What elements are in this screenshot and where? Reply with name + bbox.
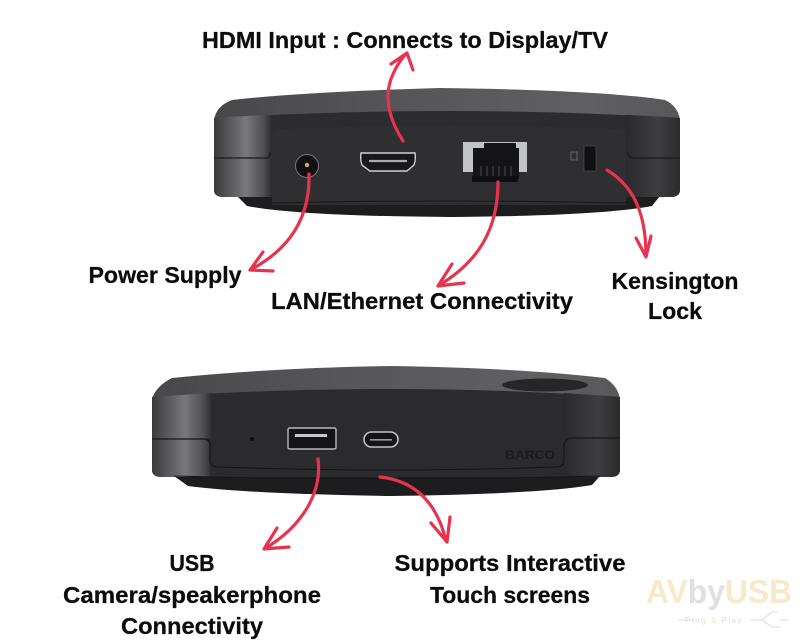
seam lines [152,438,620,470]
label: USB: USB [170,550,214,576]
device: front view with USB ports [152,366,620,496]
recessed port panel [272,126,626,205]
device: rear view with ports [214,88,680,217]
logo USB icon [678,612,788,627]
USB C port [364,432,398,447]
label: lock: Lock [648,298,702,324]
device seam lines [214,152,680,158]
power button [502,378,588,392]
HDMI port [361,153,415,171]
status LED [250,437,254,441]
label: Kensington: Kensington [612,268,738,294]
label: touch screens: Touch screens [430,582,590,608]
HDMI inner contacts [369,160,407,162]
label: power supply: Power Supply [88,262,242,288]
label: camera: Camera/speakerphone [63,582,321,608]
device body [152,389,620,477]
device top surface [214,88,680,120]
arrow: Kensington [607,170,651,257]
label: supports: Supports Interactive [394,550,626,576]
device body [214,111,680,197]
device right corner [626,115,680,197]
label: LAN: LAN/Ethernet Connectivity [271,288,573,314]
Kensington lock slot [571,146,596,171]
label: connectivity: Connectivity [121,613,263,639]
arrow: HDMI input [388,53,413,141]
device right corner [564,393,620,477]
title: HDMI input label: HDMI Input : Connects to Display/TV [202,27,609,53]
device base shadow [237,196,660,217]
brand mark: BARCO [505,448,555,462]
device left corner [214,115,272,197]
logo: AVbyUSB [646,573,792,627]
USB A port [288,428,336,449]
lower chin line [272,201,626,203]
chin line [174,476,600,479]
arrow: LAN [438,182,498,286]
logo: AVbyUSB: AVbyUSB [646,573,792,610]
arrow: touch [380,477,450,542]
power socket [296,154,318,178]
logo tagline: Plug & Play [685,616,743,625]
device left corner [152,393,212,477]
LAN port [463,142,527,182]
device base [174,476,600,496]
arrow: power supply [250,174,309,271]
arrow: USB [264,459,319,549]
device top surface [152,366,620,399]
